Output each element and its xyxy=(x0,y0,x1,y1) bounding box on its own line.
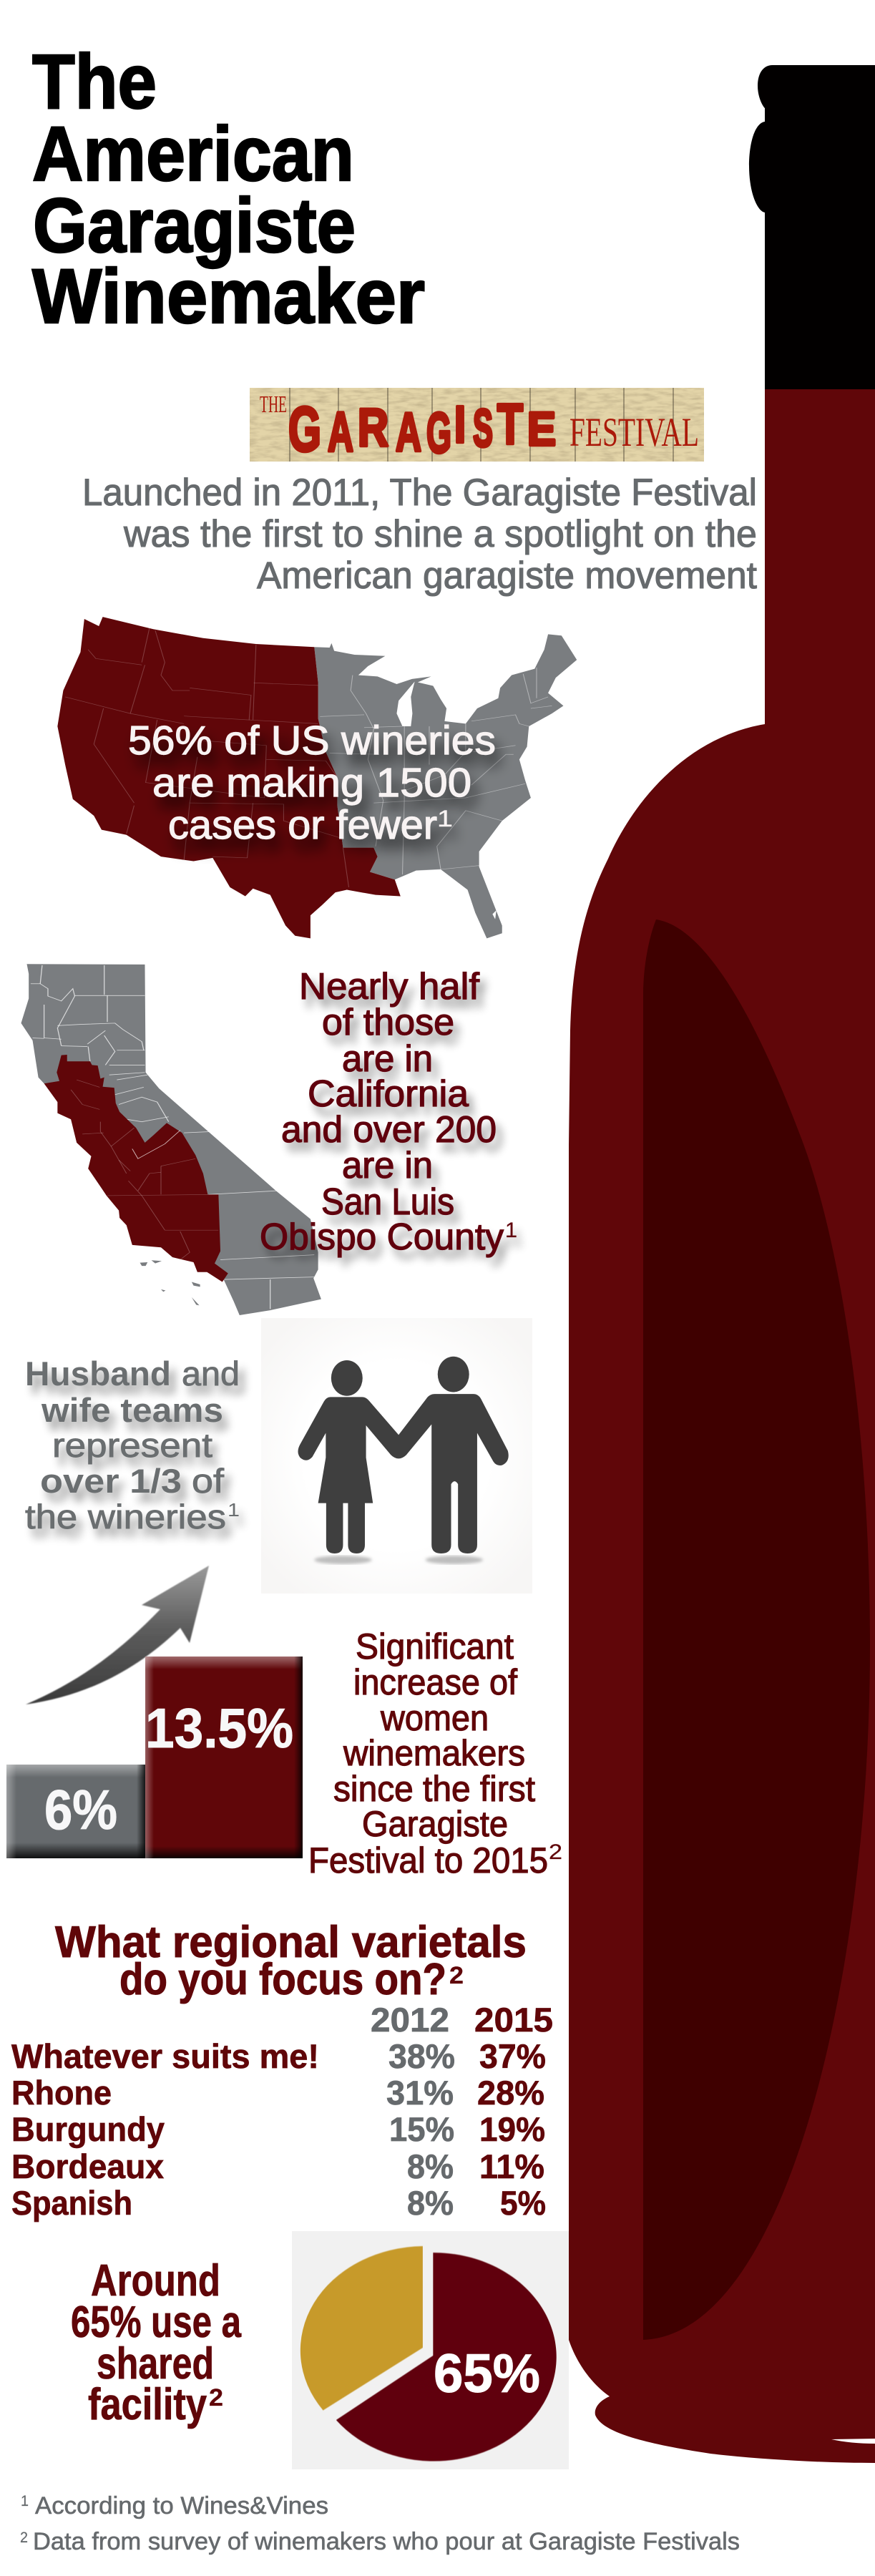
husband and wife text: over 1/3 xyxy=(40,1462,182,1500)
bottle base sliver xyxy=(831,2439,875,2444)
varietals heading xyxy=(55,1918,527,2004)
value 6%: 6% xyxy=(44,1778,117,1841)
California statistic text: 1 xyxy=(505,1219,517,1242)
logo word GARAGISTE: S xyxy=(473,399,493,458)
row: Bordeaux: Bordeaux xyxy=(11,2147,164,2185)
California statistic text: Obispo County xyxy=(260,1216,504,1258)
row: Burgundy: 19% xyxy=(479,2110,545,2148)
logo word GARAGISTE: A xyxy=(396,402,421,463)
title: Garagiste xyxy=(33,182,356,268)
red bar xyxy=(145,1657,303,1858)
US map xyxy=(57,617,577,938)
US statistic text: cases or fewer xyxy=(168,802,437,848)
varietals heading: 2 xyxy=(449,1962,464,1989)
icon: couple holding hands xyxy=(298,1357,509,1564)
bottle body xyxy=(569,389,875,2463)
california: islands xyxy=(140,1260,200,1305)
title: Winemaker xyxy=(32,253,425,339)
women winemakers text: since the first xyxy=(333,1769,535,1809)
california: county lines xyxy=(31,965,314,1309)
logo word GARAGISTE: G xyxy=(288,394,321,464)
wine bottle xyxy=(569,65,875,2463)
logo word GARAGISTE: I xyxy=(454,396,466,454)
row: Whatever suits me: Whatever suits me! xyxy=(11,2037,319,2075)
logo word GARAGISTE xyxy=(288,392,556,464)
women winemakers text: Significant xyxy=(356,1626,514,1667)
row: Whatever suits me: 38% xyxy=(388,2037,455,2075)
US statistic text: 1 xyxy=(437,806,453,831)
shared facility text: facility xyxy=(88,2380,207,2429)
California statistic text: are in xyxy=(342,1145,433,1186)
husband and wife panel xyxy=(261,1318,532,1594)
logo word GARAGISTE: R xyxy=(358,398,388,457)
California statistic text: Nearly half xyxy=(299,966,480,1008)
intro text: was the first to shine a spotlight on the xyxy=(123,513,757,555)
California statistic text: of those xyxy=(322,1002,454,1043)
title: American xyxy=(32,110,354,197)
logo word GARAGISTE: G xyxy=(426,401,451,464)
intro text: American garagiste movement xyxy=(257,555,757,597)
bottle highlight xyxy=(643,919,870,2340)
footnote 1: According to Wines&Vines xyxy=(35,2492,328,2519)
varietals heading: do you focus on? xyxy=(119,1955,446,2004)
logo word GARAGISTE: E xyxy=(527,402,556,455)
row: Spanish: 5% xyxy=(500,2184,546,2222)
map: eastern states xyxy=(314,634,577,938)
logo wood background xyxy=(250,388,704,462)
arrow xyxy=(26,1566,209,1704)
title xyxy=(32,38,425,339)
US statistic text xyxy=(128,718,496,848)
husband and wife text: represent xyxy=(52,1426,212,1464)
California statistic text xyxy=(260,966,517,1258)
women winemakers bars xyxy=(6,1657,303,1858)
Garagiste Festival logo xyxy=(250,388,704,464)
shared facility text xyxy=(71,2256,241,2429)
map: state lines east xyxy=(320,668,552,874)
husband and wife text: Husband xyxy=(25,1355,171,1392)
varietals heading: What regional varietals xyxy=(55,1918,527,1967)
pie slices xyxy=(300,2246,557,2462)
row: Spanish: Spanish xyxy=(11,2184,132,2222)
row: Whatever suits me xyxy=(11,2037,546,2075)
value 13.5%: 13.5% xyxy=(145,1697,293,1760)
row: Rhone: 31% xyxy=(386,2074,454,2112)
row: Whatever suits me: 37% xyxy=(479,2037,546,2075)
shared facility text: 65% use a xyxy=(71,2298,241,2347)
footnote 2: Data from survey of winemakers who pour at Garagiste Festivals xyxy=(33,2528,740,2555)
logo word THE: THE xyxy=(260,391,287,418)
California statistic text: and over 200 xyxy=(281,1109,497,1151)
row: Burgundy: Burgundy xyxy=(11,2110,165,2148)
shared facility text: shared xyxy=(97,2339,214,2389)
women winemakers text: women xyxy=(380,1698,489,1738)
footnote 1: 1 xyxy=(21,2493,29,2509)
bottle capsule xyxy=(749,65,875,389)
women winemakers text: winemakers xyxy=(343,1733,525,1773)
husband and wife text: of xyxy=(192,1462,225,1500)
women winemakers text xyxy=(308,1626,562,1880)
intro text: Launched in 2011, The Garagiste Festival xyxy=(82,472,757,514)
table header xyxy=(371,2001,553,2039)
shared facility text: Around xyxy=(91,2256,220,2306)
women winemakers text: increase of xyxy=(353,1662,517,1702)
shared facility pie chart xyxy=(292,2231,569,2469)
row: Spanish: 8% xyxy=(407,2184,454,2222)
row: Spanish xyxy=(11,2184,546,2222)
California statistic text: California xyxy=(308,1073,469,1115)
map: western states xyxy=(57,617,401,938)
california: gray counties xyxy=(21,964,321,1315)
varietals table xyxy=(11,2001,553,2222)
pie label: 65% xyxy=(434,2343,540,2404)
husband and wife text xyxy=(25,1355,240,1536)
row: Rhone xyxy=(11,2074,544,2112)
California statistic text: are in xyxy=(342,1038,433,1080)
row: Rhone: Rhone xyxy=(11,2074,112,2112)
intro text xyxy=(82,472,757,597)
logo word FESTIVAL: FESTIVAL xyxy=(570,410,699,455)
gray bar xyxy=(6,1765,145,1858)
title: The xyxy=(32,38,157,125)
map: lakes xyxy=(396,681,497,919)
row: Burgundy: 15% xyxy=(389,2110,454,2148)
shared facility text: 2 xyxy=(209,2384,223,2411)
row: Rhone: 28% xyxy=(477,2074,544,2112)
husband and wife text: the wineries xyxy=(25,1498,226,1536)
panel background xyxy=(261,1318,532,1594)
table header: 2012 xyxy=(371,2001,449,2039)
California statistic text: San Luis xyxy=(321,1181,454,1223)
US statistic text: are making 1500 xyxy=(152,760,471,806)
footnote 2: 2 xyxy=(20,2529,28,2546)
US statistic text: 56% of US wineries xyxy=(128,718,496,763)
row: Bordeaux xyxy=(11,2147,544,2185)
map: state lines west xyxy=(65,628,348,887)
women winemakers text: Festival to 2015 xyxy=(308,1840,548,1880)
row: Burgundy xyxy=(11,2110,545,2148)
pie background xyxy=(292,2231,569,2469)
women winemakers text: 2 xyxy=(549,1840,562,1864)
footnotes xyxy=(20,2492,740,2555)
husband and wife text: and xyxy=(182,1355,240,1392)
women winemakers text: Garagiste xyxy=(362,1804,508,1844)
husband and wife text: wife teams xyxy=(41,1391,223,1429)
table header: 2015 xyxy=(474,2001,553,2039)
row: Bordeaux: 8% xyxy=(407,2147,454,2185)
row: Bordeaux: 11% xyxy=(479,2147,544,2185)
california: highlighted county lines xyxy=(71,1080,218,1259)
logo word GARAGISTE: T xyxy=(497,392,523,456)
husband and wife text: 1 xyxy=(228,1499,240,1521)
california: highlighted counties xyxy=(44,1055,228,1282)
California map xyxy=(21,964,321,1315)
logo word GARAGISTE: A xyxy=(328,400,353,463)
